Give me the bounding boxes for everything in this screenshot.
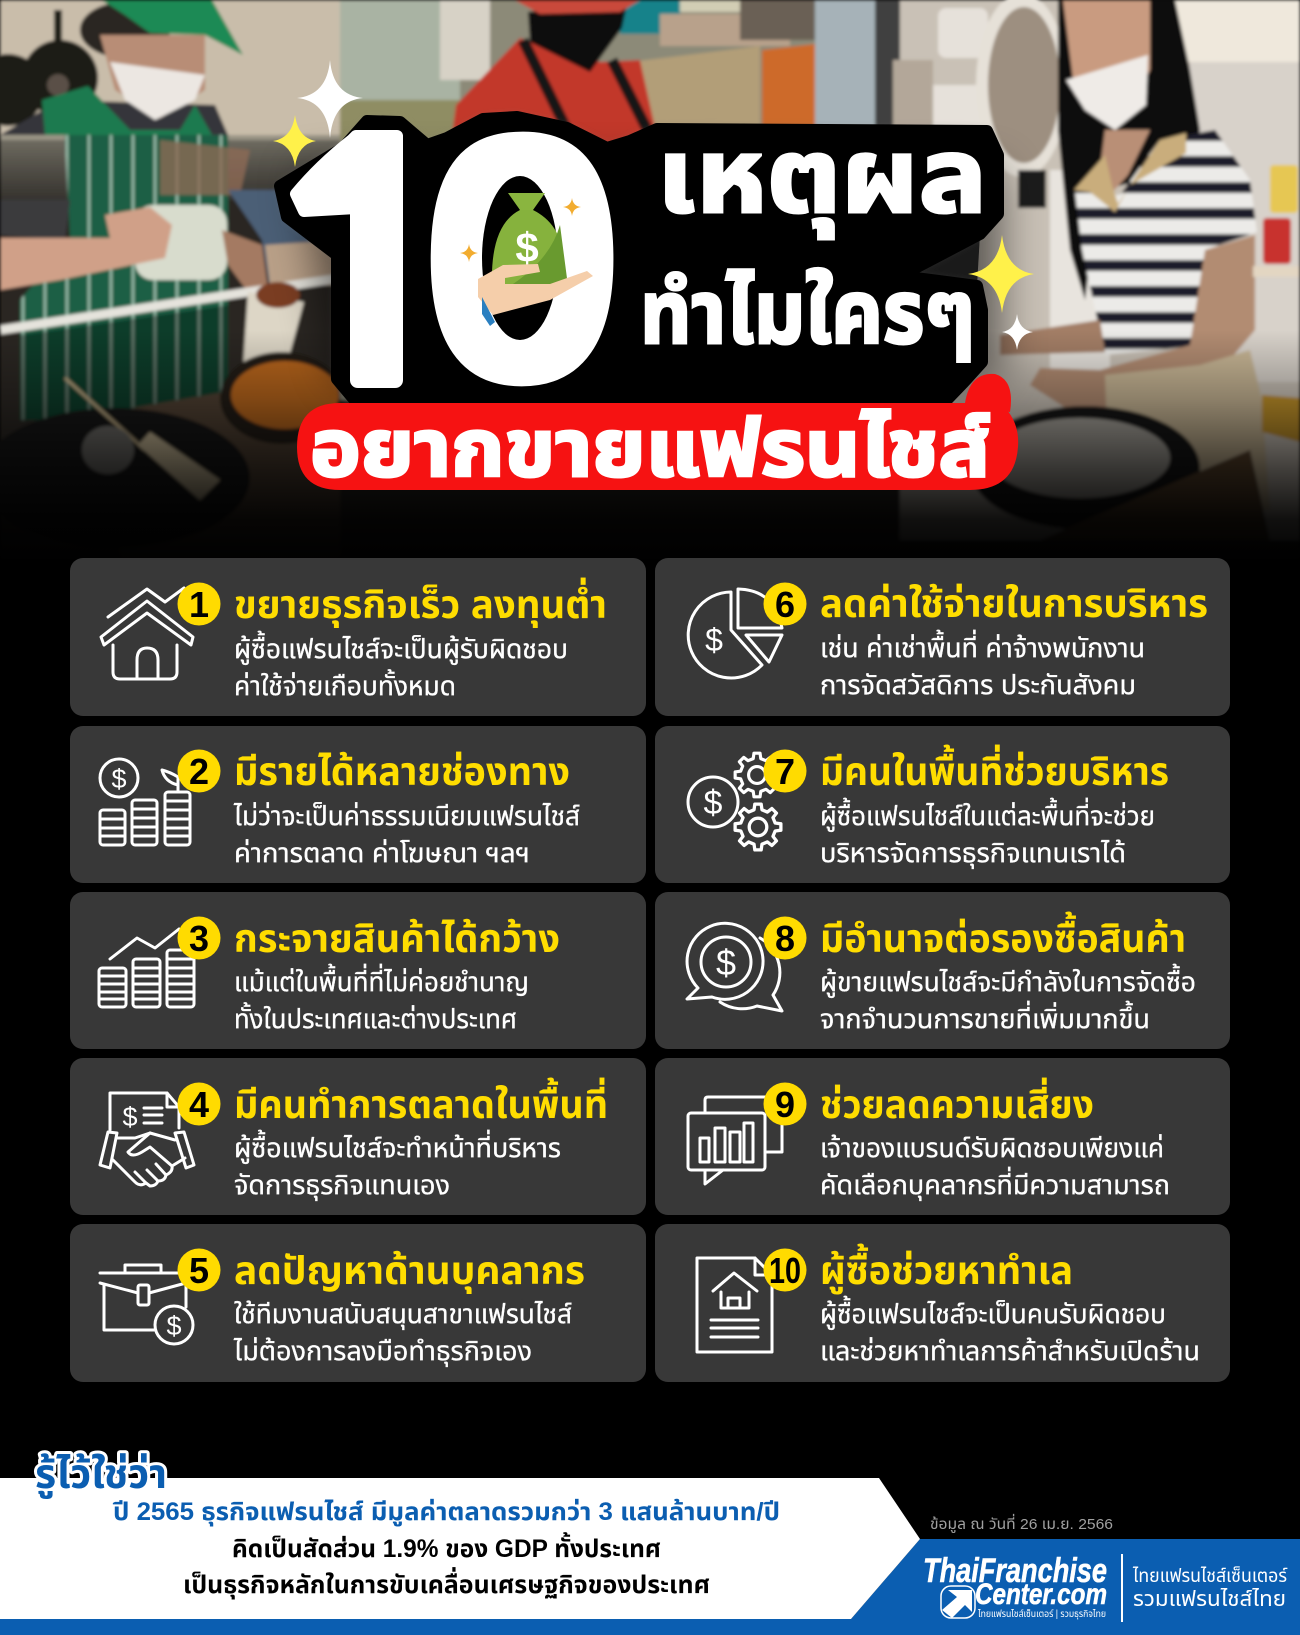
panel 7: ผู้ซื้อแฟรนไชส์ในแต่ละพื้นที่จะช่วย [820, 797, 1155, 832]
panel 1: 1 [189, 584, 209, 625]
big number 10: 1 [297, 69, 448, 449]
panel 7 [655, 726, 1230, 883]
panel 2: ไม่ว่าจะเป็นค่าธรรมเนียมแฟรนไชส์ [233, 801, 580, 831]
panel 5 [70, 1224, 646, 1382]
panel 1: ผู้ซื้อแฟรนไชส์จะเป็นผู้รับผิดชอบ [234, 630, 568, 665]
big number 10: 0 [424, 68, 621, 449]
photo: table [120, 372, 340, 560]
photo: glass rail [0, 278, 340, 330]
panel 9 [655, 1058, 1230, 1215]
icon: logo arrow [941, 1586, 975, 1618]
photo: left woman shoulders [0, 100, 228, 135]
panel 2: มีรายได้หลายช่องทาง [234, 751, 570, 794]
panel 4 [70, 1058, 646, 1215]
icon: handshake and document: $ [122, 1102, 138, 1132]
icon: rising coin stacks [99, 929, 194, 1007]
icon: coin and gears: $ [704, 784, 723, 822]
photo: right woman hair [1058, 0, 1200, 300]
panel 2 [70, 726, 646, 883]
panel 6: การจัดสวัสดิการ ประกันสังคม [820, 670, 1136, 700]
panel 7: บริหารจัดการธุรกิจแทนเราได้ [820, 838, 1126, 869]
callout line 3: เป็นธุรกิจหลักในการขับเคลื่อนเศรษฐกิจของประเทศ [183, 1567, 710, 1600]
panel 5: ลดปัญหาด้านบุคลากร [234, 1250, 585, 1294]
icon: coin and gears [688, 753, 781, 850]
callout line 2: คิดเป็นสัดส่วน 1.9% ของ GDP ทั้งประเทศ [232, 1532, 661, 1563]
red banner heading [297, 374, 1018, 493]
photo: apron body [20, 135, 228, 420]
photo: red shirt man [450, 38, 660, 150]
panel 8: 8 [775, 918, 795, 959]
logo: ThaiFranchise Center: รวมแฟรนไชส์ไทย [1133, 1588, 1286, 1611]
footer blue band [0, 1539, 1300, 1635]
photo: fry pan [0, 408, 250, 548]
photo: shirt collar [1074, 133, 1186, 212]
panel 3: ทั้งในประเทศและต่างประเทศ [234, 1002, 517, 1034]
photo: electric fan [976, 0, 1068, 208]
panel 2: ค่าการตลาด ค่าโฆษณา ฯลฯ [234, 838, 530, 868]
icon: handshake and document [100, 1093, 194, 1186]
logo: ThaiFranchise Center: ไทยแฟรนไชส์เซ็นเตอร์ | รวมธุรกิจไทย [977, 1607, 1106, 1620]
panel 2: 2 [189, 751, 209, 792]
panel 10: และช่วยหาทำเลการค้าสำหรับเปิดร้าน [820, 1336, 1200, 1366]
photo: right room wall [900, 0, 1300, 540]
photo: counter glass highlight [160, 140, 250, 195]
photo: apron badge [135, 205, 227, 280]
callout line 1: ปี 2565 ธุรกิจแฟรนไชส์ มีมูลค่าตลาดรวมกว่า 3 แสนล้านบาท/ปี [113, 1498, 780, 1527]
icon: property document [697, 1258, 772, 1352]
panel 10: ผู้ซื้อแฟรนไชส์จะเป็นคนรับผิดชอบ [820, 1295, 1166, 1330]
logo: ThaiFranchise Center: Center.com [975, 1578, 1107, 1611]
icon: coin stacks and sprout: $ [111, 764, 127, 794]
panel 5: ไม่ต้องการลงมือทำธุรกิจเอง [233, 1336, 532, 1367]
panel 1: ขยายธุรกิจเร็ว ลงทุนต่ำ [234, 577, 607, 628]
panel 9: คัดเลือกบุคลากรที่มีความสามารถ [820, 1166, 1170, 1201]
icon: coin speech bubbles [687, 923, 782, 1011]
icon: coin speech bubbles: $ [716, 942, 736, 983]
logo: ThaiFranchise Center [923, 1552, 1288, 1622]
panel 9: ช่วยลดความเสี่ยง [820, 1077, 1094, 1127]
photo: surgical mask [110, 62, 205, 120]
icon: chart speech bubble [688, 1097, 782, 1184]
icon: pie chart [688, 589, 782, 678]
photo: skewers [65, 378, 145, 450]
photo: right woman face [1063, 0, 1150, 125]
photo: left woman face and hair [80, 2, 205, 118]
callout tag: รู้ไว้ใช่ว่า: รู้ไว้ใช่ว่า [35, 1451, 167, 1499]
photo: wooden box [1040, 450, 1270, 540]
photo: striped shirt [1075, 130, 1257, 355]
photo: jars and shelf [1253, 165, 1300, 442]
panel 10: ผู้ซื้อช่วยหาทำเล [820, 1243, 1073, 1294]
photo: sneeze guard glass [0, 135, 350, 200]
panel 4: จัดการธุรกิจแทนเอง [234, 1170, 450, 1201]
logo: ThaiFranchise Center: ThaiFranchise [923, 1552, 1107, 1590]
photo: beige skirt [1105, 350, 1270, 510]
photo: hanging pans [0, 10, 98, 126]
panel 7: มีคนในพื้นที่ช่วยบริหาร [820, 744, 1169, 794]
photo: neck [1100, 130, 1150, 195]
icon: house with arrow [101, 588, 193, 679]
icon: briefcase with coin: $ [166, 1311, 182, 1341]
photo: apron straps [523, 40, 650, 140]
photo: beige slatted panel [630, 46, 760, 140]
icon: money bag on hand: $ [515, 224, 539, 271]
photo: orange panel [762, 44, 815, 135]
photo: forearm [0, 207, 172, 290]
panel 6: เช่น ค่าเช่าพื้นที่ ค่าจ้างพนักงาน [820, 629, 1145, 663]
heading: เหตุผล: เหตุผล [657, 119, 987, 239]
photo: wall panel behind arm [1050, 170, 1110, 390]
panel 5: 5 [189, 1250, 209, 1291]
panel 5: ใช้ทีมงานสนับสนุนสาขาแฟรนไชส์ [234, 1299, 572, 1330]
panel 4: 4 [189, 1084, 209, 1125]
photo: green cap [102, 0, 243, 55]
panel 3: กระจายสินค้าได้กว้าง [234, 918, 560, 961]
photo: shelf products [620, 0, 815, 46]
panel 1: ค่าใช้จ่ายเกือบทั้งหมด [234, 669, 456, 701]
panel 4: มีคนทำการตลาดในพื้นที่ [234, 1077, 608, 1127]
big number 10 [290, 130, 614, 388]
panel 6: ลดค่าใช้จ่ายในการบริหาร [820, 583, 1208, 626]
red banner heading: อยากขายแฟรนไชส์ [310, 404, 990, 493]
heading: ทำไมใครๆ: ทำไมใครๆ [640, 263, 975, 362]
panel 3: 3 [189, 918, 209, 959]
panel 8: มีอำนาจต่อรองซื้อสินค้า [820, 911, 1186, 961]
photo: appliances [915, 8, 990, 133]
panel 8: ผู้ขายแฟรนไชส์จะมีกำลังในการจัดซื้อ [820, 963, 1196, 998]
panel 1 [70, 558, 646, 716]
panel 8: จากจำนวนการขายที่เพิ่มมากขึ้น [820, 1000, 1150, 1034]
photo: left kitchen wall [0, 0, 460, 140]
panel 7: 7 [775, 751, 795, 792]
photo: left woman apron top [42, 86, 212, 135]
title black backdrop [280, 117, 1000, 410]
panel 4: ผู้ซื้อแฟรนไชส์จะทำหน้าที่บริหาร [234, 1129, 561, 1164]
logo: ThaiFranchise Center: ไทยแฟรนไชส์เซ็นเตอร์ [1132, 1566, 1288, 1587]
photo: orange wok [220, 352, 344, 444]
panel 8 [655, 892, 1230, 1049]
panel 10 [655, 1224, 1230, 1382]
icon: coin stacks and sprout [100, 759, 190, 845]
photo: centre shop wall [340, 0, 880, 400]
photo: cup [243, 292, 304, 368]
panel 10: 10 [769, 1250, 801, 1291]
panel 3 [70, 892, 646, 1049]
photo: rice pan [970, 406, 1200, 530]
panel 3: แม้แต่ในพื้นที่ที่ไม่ค่อยชำนาญ [234, 963, 529, 997]
icon: briefcase with coin [100, 1265, 193, 1344]
sparkles around title [273, 60, 1034, 350]
icon: money bag on hand [460, 193, 593, 326]
photo: black mask [528, 0, 628, 72]
data date note: ข้อมูล ณ วันที่ 26 เม.ย. 2566 [930, 1513, 1113, 1533]
panel 6 [655, 558, 1230, 716]
panel 6: 6 [775, 584, 795, 625]
icon: pie chart: $ [705, 622, 723, 658]
panel 9: 9 [775, 1084, 795, 1125]
panel 9: เจ้าของแบรนด์รับผิดชอบเพียงแค่ [820, 1133, 1164, 1163]
footer white callout [0, 1451, 920, 1619]
photo: right arm [222, 230, 268, 295]
photo: store area [815, 0, 875, 135]
photo: counter background [228, 190, 340, 290]
photo: arms [1030, 235, 1255, 430]
